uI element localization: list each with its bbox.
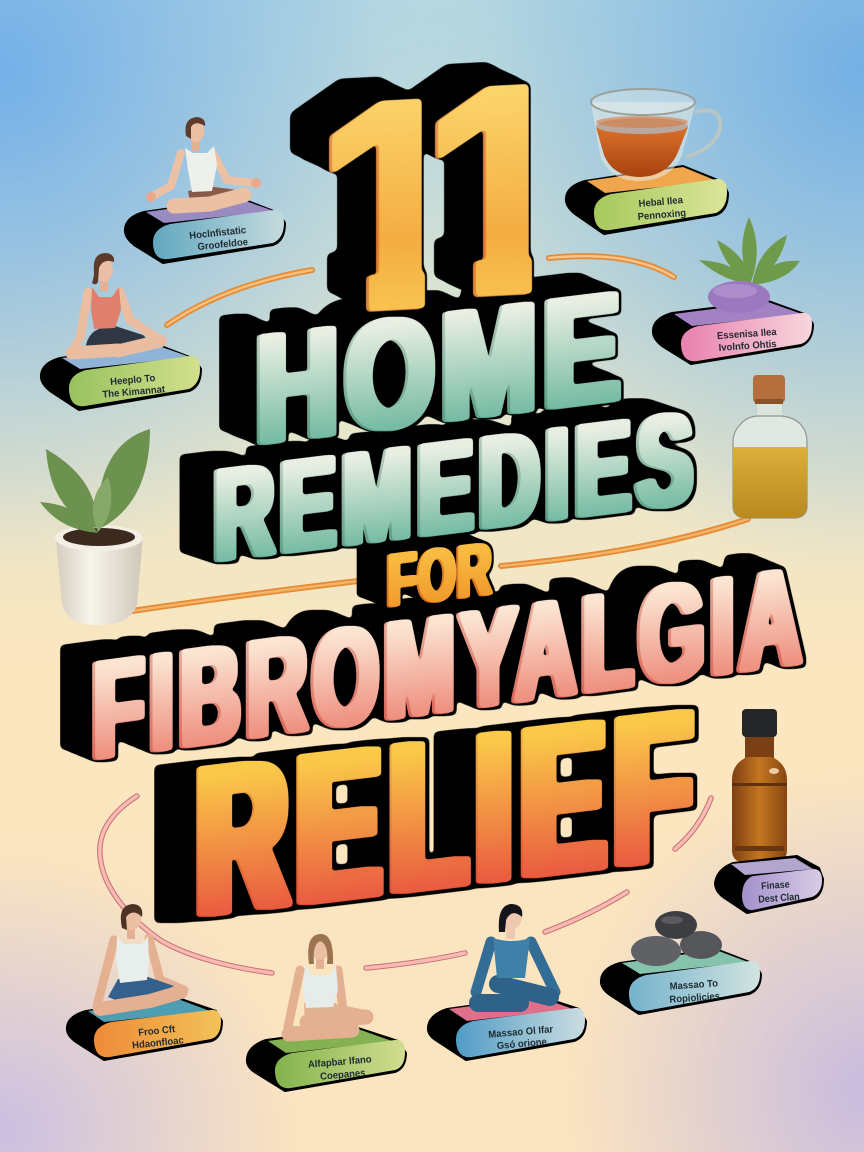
panel: platform two — [41, 344, 201, 410]
title word FOR: FOR — [388, 528, 494, 623]
panel: finase platform — [715, 856, 823, 913]
platform label: Alfapbar lfano — [307, 1054, 372, 1071]
title word FIBROMYALGIA: FIBROMYALGIA — [94, 539, 808, 788]
platform label: Dest Clan — [758, 891, 800, 906]
panel: massage oil platform — [428, 996, 586, 1060]
platform label: Heeplo To — [110, 373, 156, 388]
platform label: Essenisa Ilea — [717, 327, 778, 342]
platform label: Massao To — [669, 978, 718, 993]
panel: alpha platform — [247, 1028, 406, 1091]
icon: hot stones — [631, 911, 722, 966]
icon: glass tea cup — [591, 89, 720, 181]
title word RELIEF: RELIEF — [198, 666, 702, 959]
icon: woman seated in salmon top — [72, 253, 160, 353]
icon: amber essential oil bottle — [732, 709, 787, 863]
platform label: Hebal Ilea — [638, 195, 684, 210]
title word REMEDIES: REMEDIES — [215, 385, 700, 588]
platform label: Hoclnfistatic — [189, 225, 247, 242]
title — [94, 20, 808, 959]
title word HOME: HOME — [257, 258, 628, 476]
panel: froo platform — [67, 998, 222, 1060]
platform label: The Kimannat — [102, 384, 166, 401]
panel: massage platform — [601, 949, 761, 1014]
platform label: Massao Ol Ifar — [488, 1024, 554, 1041]
pink connector curves — [100, 796, 711, 973]
platform label: Froo Cft — [138, 1024, 176, 1039]
panel: meditation platform — [125, 198, 285, 263]
platform label: Ropiolicies — [669, 991, 721, 1006]
icon: glass oil bottle with cork — [733, 375, 807, 518]
icon: woman seated in blue shorts — [97, 904, 184, 1009]
platform label: Finase — [761, 879, 790, 893]
platform label: Hdaonfloac — [132, 1035, 185, 1052]
panel: herbal tea platform — [566, 166, 728, 234]
orange connector curves — [132, 256, 748, 611]
title number 11: 11 — [311, 20, 583, 374]
platform label: Coepanes — [320, 1068, 366, 1083]
icon: potted plant — [40, 429, 150, 625]
panel: essential oil platform — [653, 301, 813, 364]
icon: woman seated in blue outfit — [472, 904, 555, 1008]
icon: herb leaves on purple stone — [699, 217, 800, 313]
icon: woman meditating in white top — [146, 117, 261, 206]
icon: woman seated cross legged — [288, 934, 366, 1034]
platform label: Ivolnfo Ohtis — [718, 339, 778, 354]
platform label: Pennoxing — [637, 208, 687, 223]
platform label: Gsó orione — [496, 1037, 548, 1052]
platform label: Groofeldoe — [197, 237, 249, 253]
